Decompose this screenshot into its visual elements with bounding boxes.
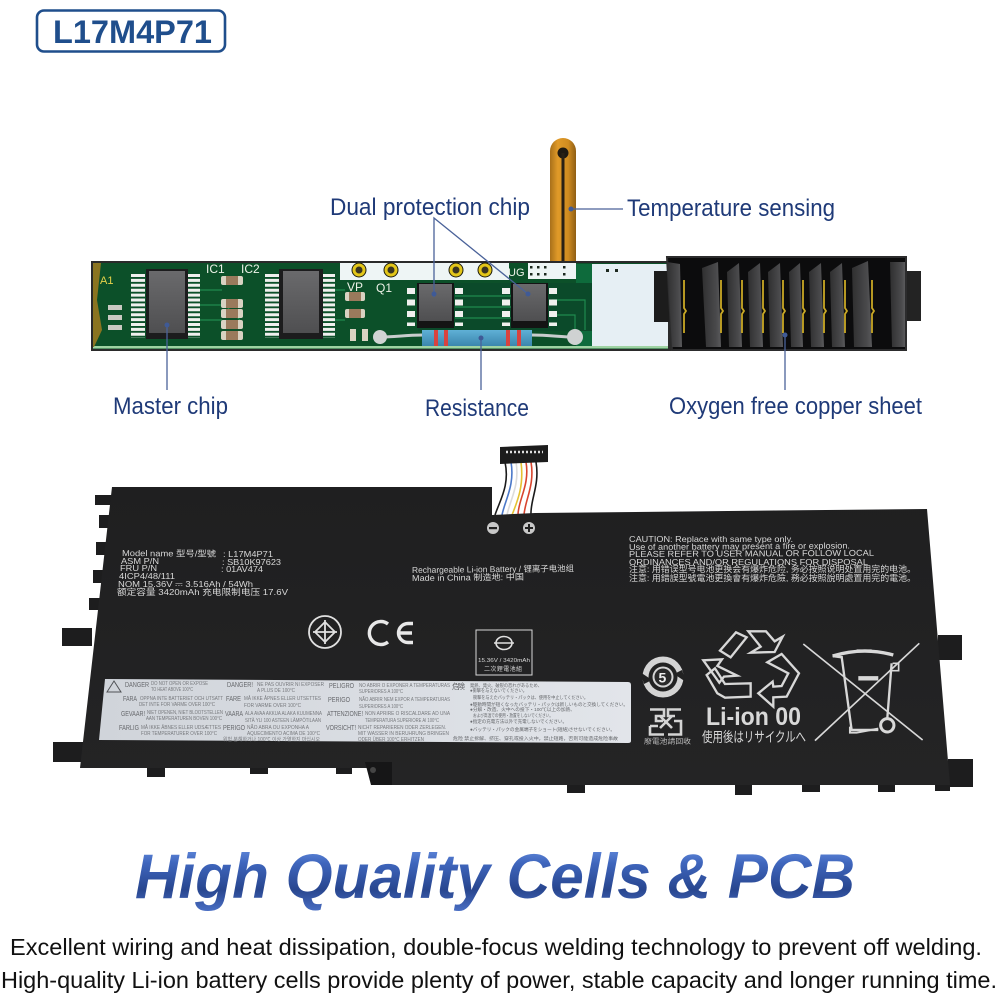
warning label: VORSICHT! bbox=[326, 723, 356, 732]
warning label: VAARA bbox=[225, 709, 243, 718]
title: High Quality Cells & PCB bbox=[135, 842, 855, 912]
warning label: MIT WASSER IN BERUHRUNG BRINGEN bbox=[358, 731, 449, 737]
callout: oxygen free copper sheet: Oxygen free copper sheet bbox=[669, 393, 922, 420]
icon: recycling triangle bbox=[703, 631, 799, 707]
master chip bbox=[138, 269, 193, 339]
icon: warning triangle bbox=[107, 681, 121, 692]
warning label: MÅ IKKE ÅPNES ELLER UTSETTES bbox=[244, 695, 321, 702]
body text: Excellent wiring and heat dissipation, double-focus welding technology to prevent off welding. bbox=[10, 934, 982, 960]
warning label: NÃO ABRA OU EXPONHA A bbox=[247, 724, 309, 731]
board silkscreen labels: IC1 bbox=[206, 262, 225, 276]
warning label: 危险 禁止拆解、挤压、穿孔或投入火中，禁止短路，否则可能造成危险事故 bbox=[453, 735, 618, 742]
warning label: FARA bbox=[123, 694, 137, 703]
board silkscreen labels: A1 bbox=[100, 275, 113, 287]
small certification box bbox=[476, 630, 532, 675]
resistor bbox=[373, 329, 583, 346]
caution text bbox=[629, 534, 916, 583]
solder pads bbox=[352, 263, 492, 277]
warning label: ●指定の充電方法以外で充電しないでください。 bbox=[470, 718, 567, 725]
panel: battery body bbox=[53, 487, 973, 795]
warning label: 위험 분해하거나 100℃ 이상 가열하지 마십시오 bbox=[223, 735, 320, 743]
callout: temperature sensing: Temperature sensing bbox=[627, 195, 835, 222]
warning label: NE PAS OUVRIR NI EXPOSER bbox=[257, 682, 324, 688]
icon: waste battery recycling bbox=[644, 710, 691, 746]
warning label: ALA AVAA AKKUA ALAKA KUUMENNA bbox=[245, 711, 322, 717]
warning label: 発熱、発火、破裂の恐れがあるため、 bbox=[470, 682, 542, 689]
warning label: DET INTE FOR VARME OVER 100°C bbox=[139, 702, 215, 708]
warning label: ●駆動時間が短くなったバッテリ・パックは新しいものと交換してください。 bbox=[470, 701, 628, 708]
warning label: A PLUS DE 100°C bbox=[257, 688, 295, 694]
panel: circuit board bbox=[91, 261, 671, 351]
board silkscreen labels: Q1 bbox=[376, 281, 392, 295]
callout: resistance: Resistance bbox=[425, 395, 529, 422]
callout: resistance bbox=[425, 336, 529, 422]
warning label: ●衝撃を与えないでください。 bbox=[470, 687, 527, 694]
callout: dual protection chip bbox=[330, 194, 530, 297]
warning label: 危険 bbox=[452, 682, 466, 691]
warning label: TEMPERATURA SUPERIORE AI 100°C bbox=[365, 718, 439, 724]
warning label: AQUECIMENTO ACIMA DE 100°C bbox=[247, 731, 320, 737]
warning label: ODER ÜBER 100°C ERHITZEN bbox=[358, 736, 424, 743]
model information text bbox=[117, 548, 288, 597]
warning label bbox=[99, 679, 631, 743]
small certification box: 二次鋰電池組 bbox=[484, 665, 522, 673]
warning label: NÃO ABRIR NEM EXPOR A TEMPERATURAS bbox=[359, 696, 450, 703]
second controller chip bbox=[272, 269, 328, 339]
small certification box: 15.36V / 3420mAh bbox=[478, 658, 530, 664]
protection chip 1 bbox=[411, 283, 459, 328]
warning label: FOR TEMPERATURER OVER 100°C bbox=[141, 731, 217, 737]
warning label: OPPNA INTE BATTERIET OCH UTSATT bbox=[140, 696, 224, 702]
model information text: : SB10K97623 bbox=[222, 557, 281, 567]
warning label: および高温での使用・放置をしないでください。 bbox=[473, 712, 553, 719]
board silkscreen labels bbox=[100, 262, 524, 295]
warning label: NIET OPENEN, NIET BLOOTSTELLEN bbox=[147, 710, 223, 716]
icon: five-year recycling mark: 5 bbox=[658, 670, 666, 686]
board silkscreen labels: UG bbox=[508, 267, 524, 279]
model information text: NOM 15.36V ⎓ 3.516Ah / 54Wh bbox=[118, 579, 253, 589]
model information text: Model name 型号/型號 bbox=[122, 548, 217, 559]
callout: dual protection chip: Dual protection chip bbox=[330, 194, 530, 221]
warning label: TO HEAT ABOVE 100°C bbox=[151, 687, 193, 693]
icon: battery wire connector bbox=[495, 445, 548, 515]
panel: battery connector bbox=[654, 257, 921, 350]
model information text: : 01AV474 bbox=[221, 564, 263, 574]
warning label: PELIGRO bbox=[329, 681, 354, 690]
callout: oxygen free copper sheet bbox=[669, 332, 922, 420]
callout: master chip bbox=[113, 322, 228, 420]
protection chip 2 bbox=[506, 283, 553, 328]
body text bbox=[1, 934, 997, 993]
warning label: 衝撃を与えたバッテリ・パックは、使用を中止してください。 bbox=[473, 694, 588, 701]
caution text: CAUTION: Replace with same type only. bbox=[629, 534, 793, 544]
warning label: PERIGO bbox=[223, 723, 245, 732]
model information text: 4ICP4/48/111 bbox=[119, 571, 175, 581]
warning label: ●分解・改造、火中への投下・100℃以上の加熱、 bbox=[470, 706, 575, 713]
warning label: DO NOT OPEN OR EXPOSE bbox=[151, 681, 208, 687]
warning label: NON APRIRE O RISCALDARE AD UNA bbox=[365, 711, 450, 717]
caution text: Use of another battery may present a fire or explosion. bbox=[629, 540, 850, 552]
warning label: GEVAAR! bbox=[121, 709, 145, 718]
rechargeable battery text: Made in China 制造地: 中国 bbox=[412, 572, 524, 583]
warning label: PERIGO bbox=[328, 695, 350, 704]
icon: waste battery recycling: 廢電池請回收 bbox=[644, 736, 691, 746]
board silkscreen labels: VP bbox=[347, 280, 363, 294]
model information text: FRU P/N bbox=[120, 563, 157, 573]
warning label: NO ABRIR O EXPONER A TEMPERATURAS bbox=[359, 683, 450, 689]
rechargeable battery text: Rechargeable Li-ion Battery / 锂离子电池组 bbox=[412, 563, 575, 575]
warning label: DANGER! bbox=[227, 680, 253, 689]
model information text: 额定容量 3420mAh 充电限制电压 17.6V bbox=[117, 587, 288, 597]
icon: five-year recycling mark bbox=[640, 656, 686, 698]
warning label: SITÄ YLI 100 ASTEEN LÄMPÖTILAAN bbox=[245, 717, 321, 724]
caution text: 注意: 用錯誤型號電池更換會有爆炸危險, 務必按照說明處置用完的電池。 bbox=[629, 573, 916, 583]
plus and minus terminals bbox=[487, 522, 535, 534]
traces and small components bbox=[108, 266, 618, 341]
warning label: FARE bbox=[226, 694, 241, 703]
icon: CE mark bbox=[369, 622, 413, 644]
body text: High-quality Li-ion battery cells provide plenty of power, stable capacity and longer running time. bbox=[1, 967, 997, 993]
warning label: FOR VARME OVER 100°C bbox=[244, 703, 301, 709]
caution text: PLEASE REFER TO USER MANUAL OR FOLLOW LOCAL bbox=[629, 548, 874, 559]
warning label: SUPERIORES A 100°C bbox=[359, 689, 403, 695]
warning label: AAN TEMPERATUREN BOVEN 100°C bbox=[146, 716, 222, 722]
Li-ion text: 使用後はリサイクルへ bbox=[702, 729, 806, 745]
model information text: : L17M4P71 bbox=[223, 549, 273, 559]
warning label: DANGER bbox=[125, 680, 149, 689]
caution text: ORDINANCES AND/OR REGULATIONS FOR DISPOSAL bbox=[629, 557, 868, 567]
warning label: ●バッテリ・パックの金属端子をショート(短絡)させないでください。 bbox=[470, 726, 615, 733]
model information text: ASM P/N bbox=[121, 556, 159, 566]
battery mounting tabs bbox=[53, 495, 973, 795]
caution text: 注意: 用错误型号电池更换会有爆炸危险, 务必按照说明处置用完的电池。 bbox=[629, 564, 916, 574]
icon: temperature sensor flex cable bbox=[550, 138, 576, 263]
warning label: NICHT REPARIEREN ODER ZERLEGEN. bbox=[358, 725, 446, 731]
warning label: FARLIG bbox=[119, 723, 139, 732]
board silkscreen labels: IC2 bbox=[241, 262, 260, 276]
callout: master chip: Master chip bbox=[113, 393, 228, 420]
warning label: SUPERIORES A 100°C bbox=[359, 704, 403, 710]
warning label: MÅ IKKE ÅBNES ELLER UDSÆTTES bbox=[141, 724, 221, 731]
Li-ion text: Li-ion 00 bbox=[706, 703, 801, 731]
rechargeable battery text bbox=[412, 563, 575, 583]
Li-ion text bbox=[702, 703, 806, 745]
icon: safety mark bbox=[309, 616, 341, 648]
icon: crossed-out bin bbox=[803, 643, 923, 741]
warning label: ATTENZIONE! bbox=[327, 709, 363, 718]
model badge: L17M4P71 bbox=[53, 14, 212, 50]
